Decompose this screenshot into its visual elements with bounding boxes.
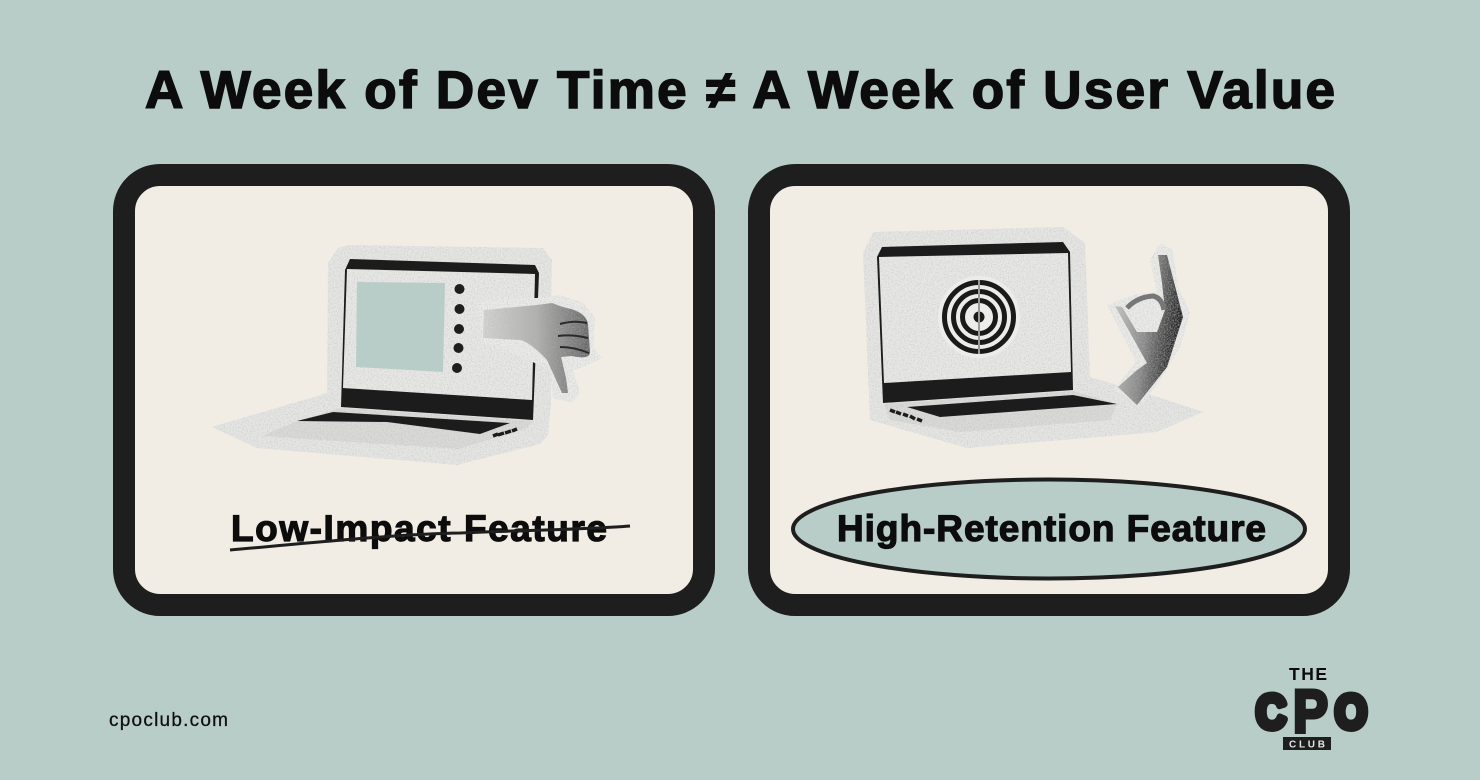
illustration: laptop with target	[863, 227, 1203, 448]
logo badge: CLUB: CLUB	[1289, 740, 1325, 750]
laptop base shading	[884, 391, 1117, 432]
logo word: CPO	[1256, 678, 1367, 745]
teal content block	[356, 282, 445, 372]
footer url: cpoclub.com	[109, 710, 228, 731]
laptop screen bezel	[877, 242, 1073, 403]
keyboard	[907, 395, 1117, 417]
strikethrough line	[230, 526, 630, 550]
laptop screen	[343, 269, 535, 400]
icon: thumbs-down hand	[477, 295, 602, 403]
logo word: CPO: P	[1293, 678, 1328, 745]
ports	[493, 429, 517, 436]
keyboard	[297, 412, 510, 434]
card frame	[124, 175, 704, 605]
paper cutout	[212, 245, 552, 465]
label: low-impact feature: Low-Impact Feature	[231, 508, 607, 549]
title: A Week of Dev Time ≠ A Week of User Value	[145, 61, 1335, 120]
logo: The CPO Club	[1256, 664, 1367, 750]
logo word: THE: THE	[1289, 664, 1327, 684]
icon: bullseye target	[938, 276, 1020, 358]
illustration: laptop with dots	[212, 245, 602, 465]
logo word: CPO: O	[1335, 685, 1367, 738]
laptop screen bezel	[341, 259, 539, 420]
laptop base shading	[262, 408, 533, 449]
paper cutout	[863, 227, 1203, 448]
card frame	[759, 175, 1339, 605]
highlight ellipse	[793, 480, 1305, 578]
ports	[890, 410, 922, 421]
panel: high-retention feature	[759, 175, 1339, 605]
label: high-retention feature: High-Retention Feature	[837, 508, 1266, 549]
dot list	[452, 284, 464, 373]
logo word: CPO: C	[1256, 685, 1286, 738]
laptop screen	[879, 253, 1071, 383]
icon: OK hand	[1107, 243, 1190, 405]
panel: low-impact feature	[124, 175, 704, 605]
